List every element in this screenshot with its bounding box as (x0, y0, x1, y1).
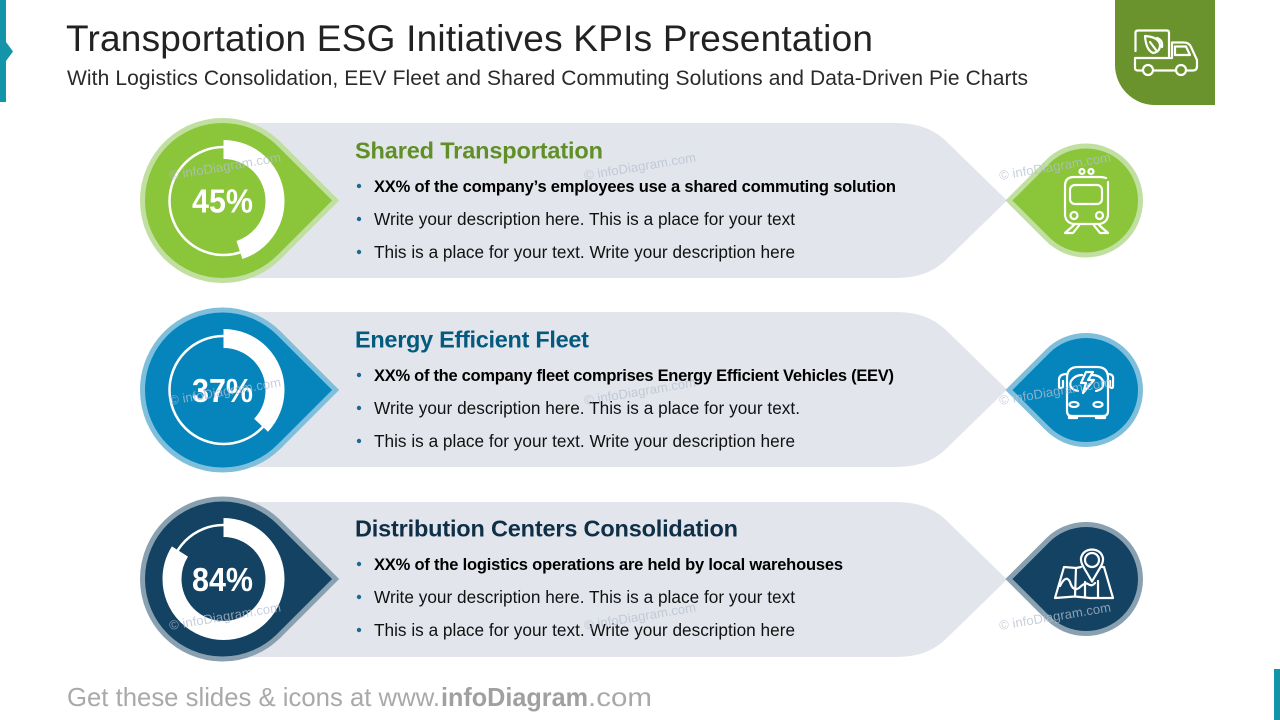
bullet list row 3: This is a place for your text. Write your description here (374, 620, 795, 640)
watermarks: © infoDiagram.com (583, 150, 697, 183)
watermarks: © infoDiagram.com (998, 150, 1112, 183)
bottom right accent bar (1274, 669, 1280, 720)
bullet list row 1 (357, 178, 896, 262)
right pin with electric bus icon (1009, 336, 1140, 444)
watermarks: © infoDiagram.com (998, 375, 1112, 408)
icon: eco truck (1135, 30, 1197, 75)
bullet list row 2: XX% of the company fleet comprises Energy Efficient Vehicles (EEV) (374, 367, 894, 385)
icon: electric bus (1059, 367, 1113, 418)
title: Transportation ESG Initiatives KPIs Presentation (66, 18, 873, 59)
heading: energy efficient fleet: Energy Efficient Fleet (355, 326, 589, 352)
watermarks (168, 150, 1112, 633)
footer promo line: infoDiagram (441, 682, 588, 712)
watermarks: © infoDiagram.com (998, 600, 1112, 633)
bullet list row 2: This is a place for your text. Write your description here (374, 431, 795, 451)
bullet list row 1: XX% of the company’s employees use a shared commuting solution (374, 178, 896, 196)
right pin with map icon (1009, 524, 1140, 634)
left pin with 45% donut: 45% (192, 182, 253, 220)
watermarks: © infoDiagram.com (583, 375, 697, 408)
panel: row 1 background arrow (230, 123, 1007, 278)
left pin with 45% donut (143, 120, 336, 281)
panel: row 2 background arrow (230, 312, 1007, 467)
row 3: distribution centers consolidation (143, 499, 1140, 659)
heading: distribution centers consolidation: Distribution Centers Consolidation (355, 516, 738, 542)
footer promo line (67, 682, 652, 712)
left pin with 37% donut: 37% (192, 372, 253, 409)
subtitle: With Logistics Consolidation, EEV Fleet and Shared Commuting Solutions and Data-Driven Pie Charts (67, 67, 1028, 90)
footer promo line: .com (588, 682, 652, 712)
watermarks: © infoDiagram.com (168, 150, 282, 183)
watermarks: © infoDiagram.com (583, 600, 697, 633)
bullet list row 3: XX% of the logistics operations are held by local warehouses (374, 556, 843, 574)
bullet list row 1: Write your description here. This is a place for your text (374, 209, 795, 229)
bullet list row 3: Write your description here. This is a place for your text (374, 587, 795, 607)
left pin with 84% donut: 84% (192, 561, 253, 598)
footer promo line: Get these slides & icons at www. (67, 682, 440, 712)
row 2: energy efficient fleet (143, 310, 1140, 470)
row 1: shared transportation (143, 120, 1140, 281)
bullet list row 1: This is a place for your text. Write your description here (374, 242, 795, 262)
panel: row 3 background arrow (230, 502, 1007, 657)
header badge with truck icon (1115, 0, 1215, 105)
right pin with train icon (1009, 146, 1140, 255)
icon: train (1065, 169, 1108, 233)
icon: map with location pin (1055, 550, 1113, 598)
bullet list row 3 (357, 556, 843, 640)
bullet list row 2: Write your description here. This is a place for your text. (374, 398, 800, 418)
bullet list row 2 (357, 367, 894, 451)
left pin with 37% donut (143, 310, 336, 470)
left pin with 84% donut (143, 499, 336, 659)
heading: shared transportation: Shared Transportation (355, 138, 603, 164)
left accent bar with notch (0, 0, 13, 102)
watermarks: © infoDiagram.com (168, 375, 282, 408)
watermarks: © infoDiagram.com (168, 600, 282, 633)
